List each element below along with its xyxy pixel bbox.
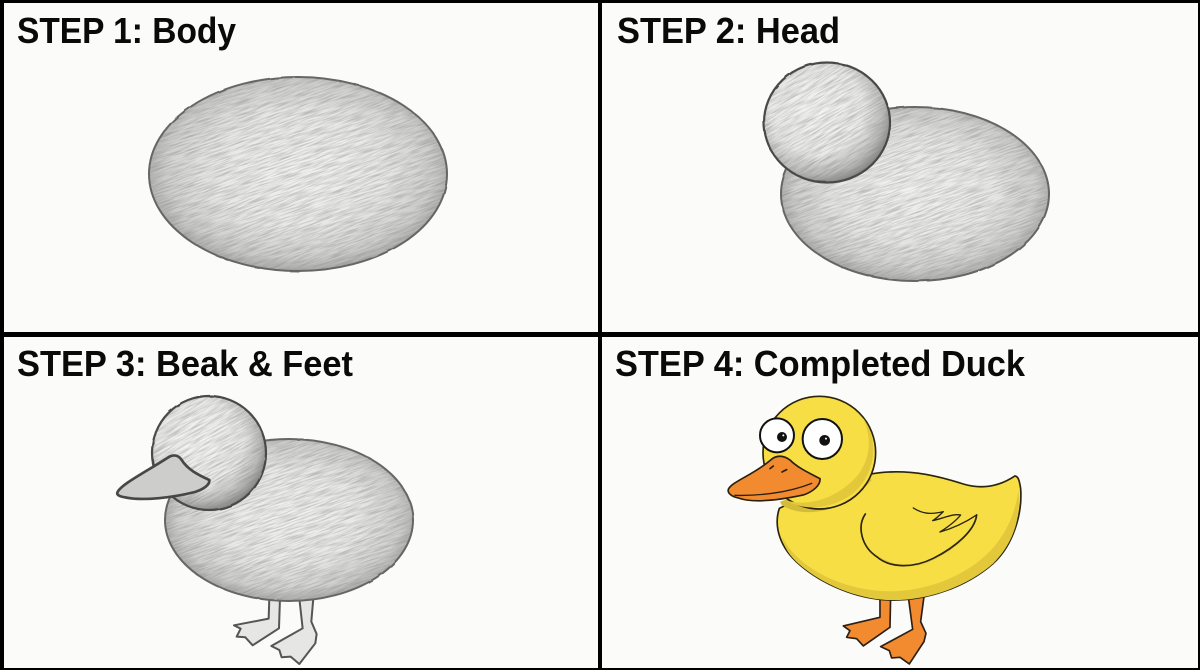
right eye xyxy=(803,419,842,459)
pencil circle head xyxy=(762,61,892,184)
left eye xyxy=(760,418,794,452)
duck feet xyxy=(843,597,926,664)
yellow duck illustration xyxy=(728,396,1021,664)
heading: step 2: STEP 2: Head xyxy=(617,10,840,51)
shadow cast by head on body xyxy=(780,473,872,512)
pencil circle head xyxy=(150,394,268,512)
duck body xyxy=(777,472,1021,600)
pencil oval body xyxy=(780,106,1050,282)
heading: step 3: STEP 3: Beak & Feet xyxy=(17,343,353,384)
panel: step 1 body xyxy=(4,3,598,332)
heading: step 1: STEP 1: Body xyxy=(17,10,236,51)
pencil feet xyxy=(234,598,317,664)
panel: step 4 completed duck xyxy=(602,337,1198,668)
duck head xyxy=(763,396,876,509)
panel: step 2 head xyxy=(602,3,1198,332)
panel: step 3 beak and feet xyxy=(4,337,598,670)
head shadow xyxy=(785,417,873,507)
pencil oval body xyxy=(148,76,448,272)
body underside shadow xyxy=(782,490,1019,600)
pencil oval body xyxy=(164,438,414,602)
wing xyxy=(861,508,977,566)
heading: step 4: STEP 4: Completed Duck xyxy=(615,343,1026,384)
beak xyxy=(728,456,820,501)
pencil beak xyxy=(117,455,209,499)
